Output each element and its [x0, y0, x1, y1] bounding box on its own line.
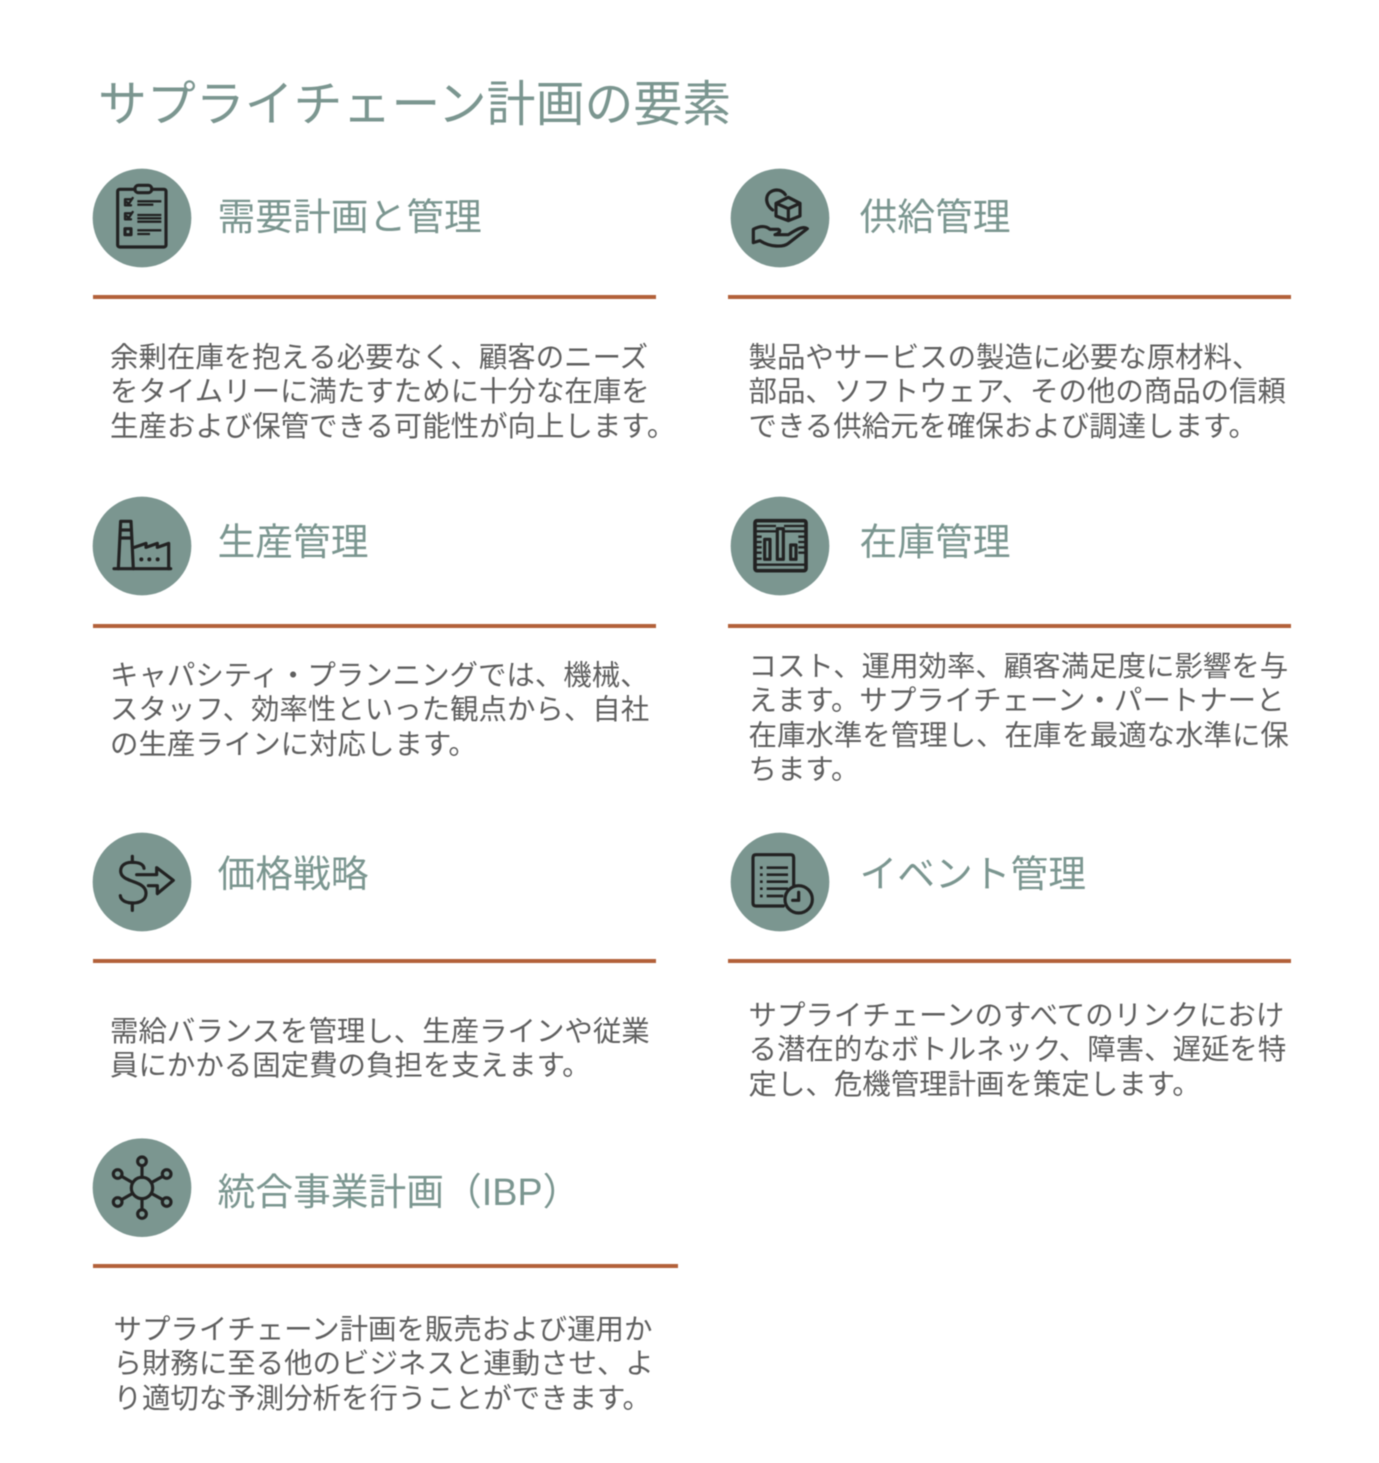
- text: inventory: コスト、運用効率、顧客満足度に影響を与: [748, 651, 1288, 683]
- text: demand: をタイムリーに満たすために十分な在庫を: [110, 376, 650, 408]
- icon: dollar with arrow: [92, 832, 192, 932]
- icon: document with clock: [730, 832, 830, 932]
- text: IBP: [114, 1314, 654, 1415]
- text: inventory: [748, 651, 1289, 786]
- icon: inventory chart: [730, 496, 830, 596]
- text: production: スタッフ、効率性といった観点から、自社: [110, 694, 649, 726]
- text: demand: [110, 342, 675, 443]
- heading: events: イベント管理: [860, 853, 1086, 895]
- text: supply: できる供給元を確保および調達します。: [748, 411, 1257, 443]
- text: pricing: 需給バランスを管理し、生産ラインや従業: [110, 1016, 650, 1048]
- text: events: [748, 1000, 1286, 1101]
- text: inventory: 在庫水準を管理し、在庫を最適な水準に保: [748, 720, 1289, 752]
- heading: IBP: 統合事業計画（IBP）: [218, 1171, 580, 1213]
- text: supply: 部品、ソフトウェア、その他の商品の信頼: [748, 376, 1286, 408]
- divider: production: [93, 624, 656, 628]
- heading: production: 生産管理: [218, 521, 368, 563]
- text: inventory: ちます。: [748, 754, 859, 786]
- text: demand: 生産および保管できる可能性が向上します。: [110, 411, 675, 443]
- icon: network hub: [92, 1138, 192, 1238]
- heading: supply: 供給管理: [860, 196, 1010, 238]
- icon: factory: [92, 496, 192, 596]
- divider: pricing: [93, 958, 656, 962]
- divider: IBP: [93, 1264, 678, 1268]
- divider: demand: [93, 295, 656, 299]
- icon: hand holding box: [730, 168, 830, 268]
- text: IBP: サプライチェーン計画を販売および運用か: [114, 1314, 652, 1346]
- icon: clipboard checklist: [92, 168, 192, 268]
- text: pricing: [110, 1016, 650, 1082]
- text: production: [110, 660, 650, 761]
- text: supply: [748, 342, 1286, 443]
- text: IBP: ら財務に至る他のビジネスと連動させ、よ: [114, 1348, 654, 1380]
- heading: pricing: 価格戦略: [218, 853, 368, 895]
- text: events: サプライチェーンのすべてのリンクにおけ: [748, 1000, 1284, 1032]
- divider: inventory: [728, 624, 1291, 628]
- text: production: の生産ラインに対応します。: [110, 729, 477, 761]
- text: pricing: 員にかかる固定費の負担を支えます。: [110, 1050, 591, 1082]
- divider: events: [728, 958, 1291, 962]
- text: events: る潜在的なボトルネック、障害、遅延を特: [748, 1034, 1286, 1066]
- text: inventory: えます。サプライチェーン・パートナーと: [748, 685, 1285, 717]
- text: production: キャパシティ・プランニングでは、機械、: [110, 660, 649, 692]
- heading: demand: 需要計画と管理: [218, 196, 482, 238]
- text: demand: 余剰在庫を抱える必要なく、顧客のニーズ: [110, 342, 648, 374]
- text: events: 定し、危機管理計画を策定します。: [748, 1069, 1201, 1101]
- title: サプライチェーン計画の要素: [98, 78, 731, 132]
- text: supply: 製品やサービスの製造に必要な原材料、: [748, 342, 1260, 374]
- heading: inventory: 在庫管理: [860, 521, 1010, 563]
- text: IBP: り適切な予測分析を行うことができます。: [114, 1383, 651, 1415]
- divider: supply: [728, 295, 1291, 299]
